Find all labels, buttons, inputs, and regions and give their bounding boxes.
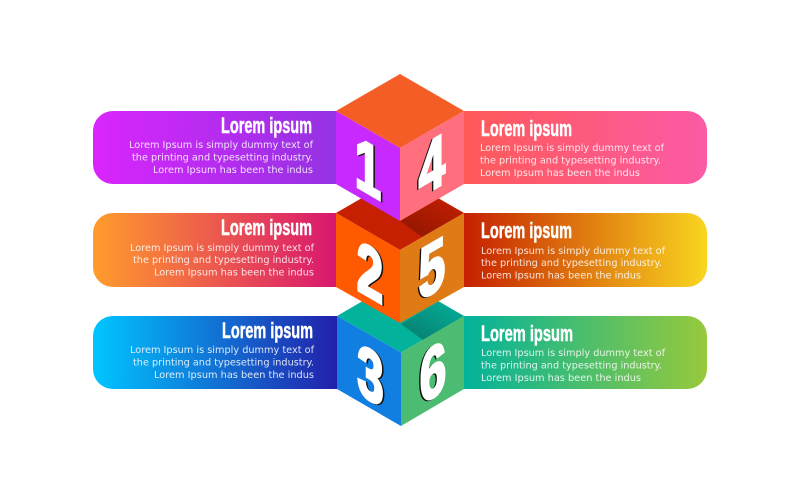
text block 1 — [129, 140, 313, 176]
cube: 1 and 4 — [336, 74, 464, 221]
number 4: 4 — [419, 117, 446, 213]
text block 2 — [130, 243, 314, 278]
text block 4: the printing and typesetting industry. — [480, 156, 661, 166]
text block 1: Lorem Ipsum is simply dummy text of — [129, 140, 313, 151]
bar 4 — [464, 111, 707, 184]
panel: item 6 — [464, 316, 707, 389]
heading 1: Lorem ipsum — [221, 113, 312, 138]
bar 3 — [93, 316, 337, 389]
bar 6 — [464, 316, 707, 389]
text block 4: Lorem Ipsum has been the indus — [480, 168, 640, 179]
text block 1: the printing and typesetting industry. — [132, 152, 313, 164]
text block 4 — [480, 143, 664, 179]
text block 3: Lorem Ipsum has been the indus — [154, 370, 314, 381]
panel: item 2 — [93, 213, 336, 287]
number 2: 2 — [358, 225, 385, 321]
text block 3: Lorem Ipsum is simply dummy text of — [130, 345, 314, 356]
bar 1 — [93, 111, 336, 184]
number 3: 3 — [357, 327, 384, 423]
heading 2: Lorem ipsum — [221, 215, 312, 240]
bar 5 — [464, 213, 707, 287]
number 1: 1 — [356, 121, 383, 217]
text block 6: Lorem Ipsum has been the indus — [481, 373, 641, 384]
panel: item 4 — [464, 111, 707, 184]
bar 2 — [93, 213, 336, 287]
number 5: 5 — [419, 220, 445, 316]
text block 6: Lorem Ipsum is simply dummy text of — [481, 348, 665, 359]
panel: item 3 — [93, 316, 337, 389]
text block 3 — [130, 345, 314, 381]
text block 2: Lorem Ipsum is simply dummy text of — [130, 243, 314, 254]
text block 5 — [481, 246, 665, 282]
text block 2: Lorem Ipsum has been the indus — [154, 268, 314, 278]
number 5: 5 — [417, 221, 444, 317]
heading 4: Lorem ipsum — [481, 116, 572, 141]
panel: item 5 — [464, 213, 707, 287]
panel: item 1 — [93, 111, 336, 184]
text block 4: Lorem Ipsum is simply dummy text of — [480, 143, 664, 154]
number 3: 3 — [359, 328, 385, 424]
heading 5: Lorem ipsum — [481, 218, 572, 243]
text block 5: Lorem Ipsum has been the indus — [481, 270, 641, 282]
text block 2: the printing and typesetting industry. — [133, 255, 314, 266]
cube: 3 and 6 — [337, 279, 464, 426]
text block 6 — [481, 348, 665, 384]
text block 6: the printing and typesetting industry. — [481, 360, 662, 372]
number 6: 6 — [418, 325, 445, 421]
text block 1: Lorem Ipsum has been the indus — [153, 165, 313, 176]
text block 5: the printing and typesetting industry. — [481, 258, 662, 269]
heading 6: Lorem ipsum — [481, 321, 573, 346]
text block 5: Lorem Ipsum is simply dummy text of — [481, 246, 665, 257]
heading 3: Lorem ipsum — [222, 318, 313, 343]
number 4: 4 — [417, 118, 444, 214]
number 6: 6 — [420, 324, 446, 420]
text block 3: the printing and typesetting industry. — [133, 358, 314, 368]
number 1: 1 — [355, 120, 381, 216]
cube: 2 and 5 — [336, 176, 464, 323]
number 2: 2 — [357, 224, 383, 320]
